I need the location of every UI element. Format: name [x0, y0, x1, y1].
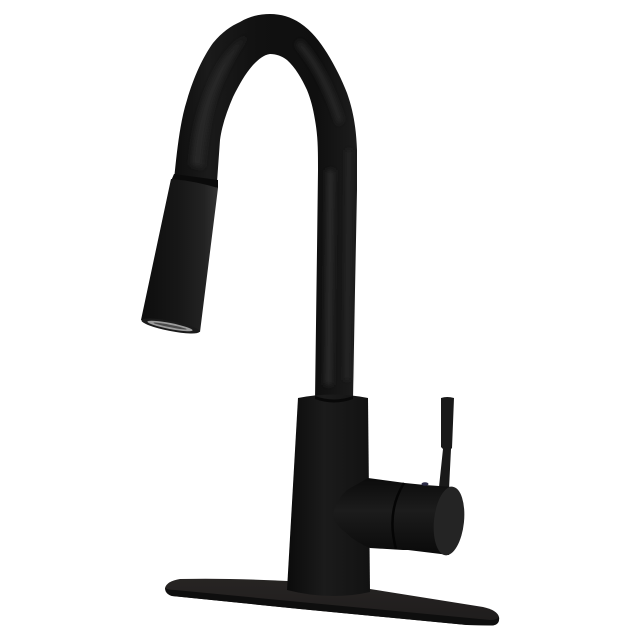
spray head collar: [171, 174, 218, 188]
spray head nozzle: [141, 315, 200, 337]
handle lever: [439, 397, 454, 489]
faucet body: [287, 394, 370, 596]
deck plate: [165, 579, 499, 626]
pull-down spray head: [141, 179, 218, 332]
handle hub: [333, 478, 453, 555]
handle button: [422, 482, 428, 486]
handle seam: [392, 483, 404, 549]
gooseneck spout: [174, 14, 357, 400]
neck highlight bands: [191, 36, 351, 385]
handle end cap: [430, 485, 468, 557]
